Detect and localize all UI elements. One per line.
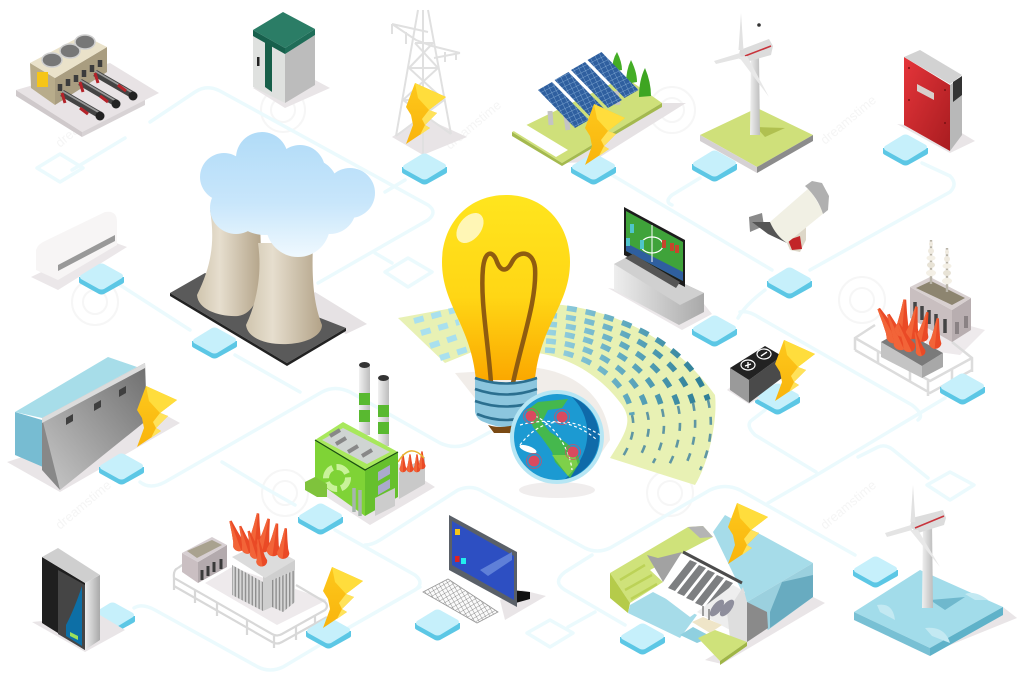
icon: solar farm <box>512 52 686 166</box>
tile: offshore turbine node <box>853 556 898 588</box>
icon: bolt on dam <box>137 386 177 447</box>
icon: air conditioner <box>31 212 127 290</box>
icon: battery <box>727 346 782 404</box>
icon: green-roof cabinet <box>253 12 330 108</box>
watermark spirals and stock marks: dreamstime <box>817 92 879 147</box>
icon: red inverter cabinet <box>897 50 975 153</box>
watermark spirals and stock marks: dreamstime <box>442 97 504 152</box>
light bulb <box>442 195 570 433</box>
icon: laptop computer <box>423 515 546 623</box>
icon: bolt on hydro dam <box>728 503 768 564</box>
icon: transmission pylon <box>392 10 467 155</box>
icon: land wind turbine <box>700 13 813 173</box>
tile: laptop node <box>415 610 460 640</box>
tile: television node <box>692 316 737 346</box>
watermark spirals and stock marks <box>52 87 885 532</box>
tile: hydro node <box>620 624 665 654</box>
icon: bolt on battery <box>775 340 815 401</box>
icon: lower substation <box>174 513 327 648</box>
tile: air conditioner node <box>79 264 124 294</box>
icon: offshore wind turbine <box>854 485 1017 656</box>
tile: solar node <box>571 154 616 184</box>
tile: factory node <box>298 504 343 534</box>
icon: right substation <box>855 240 985 396</box>
icon: concrete dam <box>7 357 180 492</box>
tile: pylon node <box>402 154 447 184</box>
tile: red cabinet node <box>883 134 928 166</box>
icon: bolt on pylon <box>406 83 446 144</box>
tile: battery node <box>755 384 800 414</box>
icon: television on stand <box>608 207 712 330</box>
icon: bolt on lower substation <box>323 567 363 628</box>
tile: server node <box>90 602 135 634</box>
globe <box>510 390 604 484</box>
icon: hydroelectric dam <box>610 515 825 665</box>
icon: security camera <box>749 181 829 252</box>
tile: right substation node <box>940 374 985 404</box>
icon: cooling towers <box>170 132 375 366</box>
mirror field <box>398 303 716 485</box>
tile: cooling tower node <box>192 328 237 358</box>
icon: black server tower <box>32 548 125 652</box>
tile: lower substation node <box>306 618 351 648</box>
icon: bolt on solar farm <box>585 104 625 165</box>
network connection lines <box>37 88 974 670</box>
watermark spirals and stock marks: dreamstime <box>817 477 879 532</box>
shadow under lamp and globe <box>455 368 610 498</box>
watermark spirals and stock marks: dreamstime <box>52 95 114 150</box>
tile: camera node <box>767 268 812 298</box>
watermark spirals and stock marks: dreamstime <box>52 477 114 532</box>
tile: turbine node <box>692 150 737 182</box>
icon: chiller plant <box>16 35 159 137</box>
icon: recycling factory <box>305 362 435 525</box>
tile: dam node <box>99 454 144 484</box>
